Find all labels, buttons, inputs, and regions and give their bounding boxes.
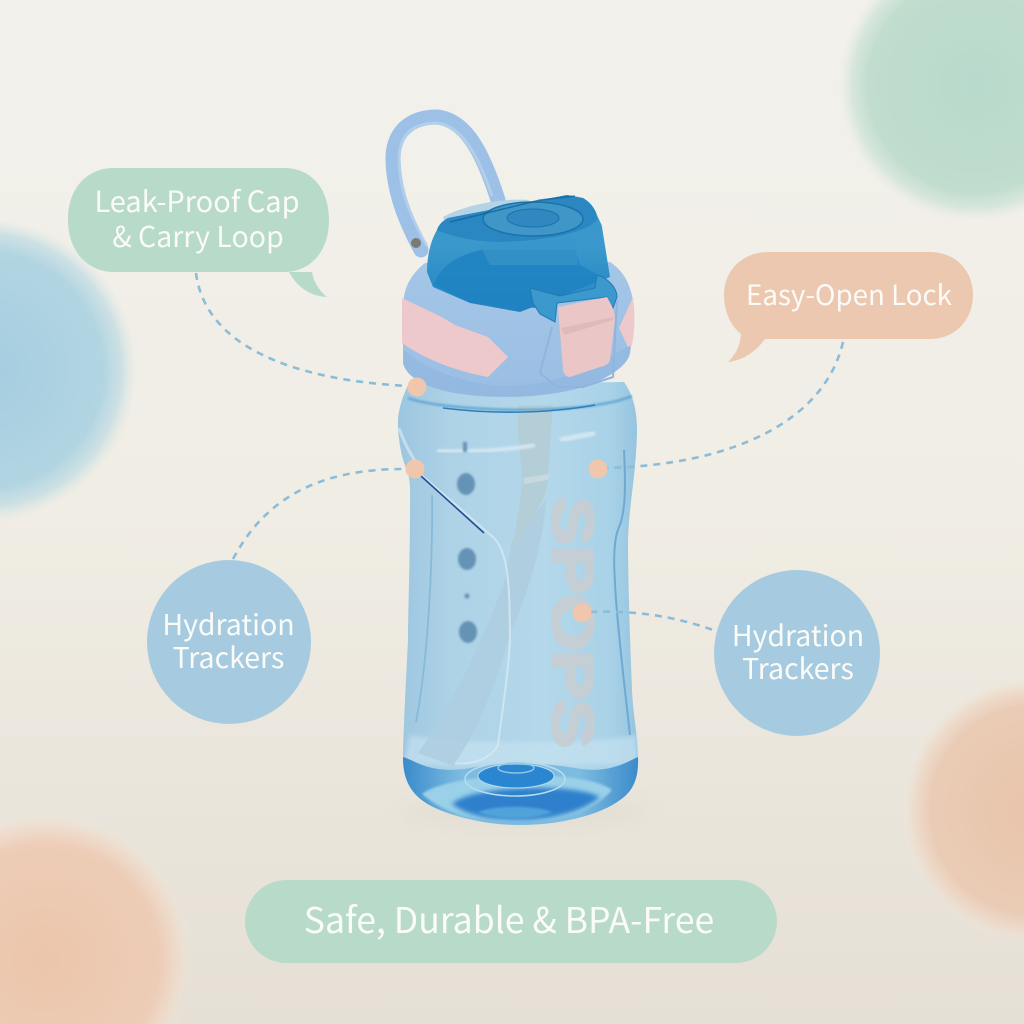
bottle lettering: SPOPS	[540, 497, 604, 748]
callout: leak-proof cap	[68, 168, 329, 297]
bottle	[398, 382, 650, 825]
decorative blob: blue left	[0, 215, 140, 525]
marker dots	[406, 378, 608, 622]
bottle base	[403, 757, 638, 825]
lid rear disc	[443, 200, 530, 232]
banner: safe, durable, BPA-free: Safe, Durable & BPA-Free	[304, 893, 714, 944]
lock housing	[540, 300, 617, 387]
callout: easy-open lock: Easy-Open Lock	[746, 273, 952, 313]
pale water band	[404, 735, 638, 765]
connector: leak-proof cap	[196, 273, 408, 386]
lid inner cylinder	[434, 250, 606, 308]
connector: easy-open lock	[605, 342, 843, 468]
blue flip lid	[427, 195, 617, 322]
badge: hydration trackers right	[714, 570, 880, 736]
callout: leak-proof cap: & Carry Loop	[112, 215, 284, 256]
measurement marks	[457, 442, 477, 643]
badge: hydration trackers left: Hydration	[162, 603, 295, 644]
bottle shadow	[400, 800, 650, 824]
badge: hydration trackers left: Trackers	[173, 636, 284, 677]
decorative blob: peach right	[900, 675, 1024, 945]
callout: easy-open lock	[724, 252, 973, 362]
pink grip band left	[402, 298, 508, 377]
neck ridges	[408, 396, 632, 410]
banner: safe, durable, BPA-free	[245, 880, 777, 963]
decorative blob: peach bottom left	[0, 812, 195, 1024]
lid hinge	[530, 275, 617, 322]
straw	[418, 405, 553, 766]
pink lock latch	[558, 297, 615, 377]
bottle body	[398, 382, 638, 825]
badge: hydration trackers right: Trackers	[742, 647, 854, 688]
badge: hydration trackers right: Hydration	[732, 614, 864, 655]
decorative blob: green top right	[835, 0, 1024, 225]
callout: leak-proof cap: Leak-Proof Cap	[94, 179, 300, 221]
cap ring	[403, 262, 634, 397]
lid top plate	[437, 195, 597, 242]
base inner disc	[422, 775, 612, 822]
connector: hydration trackers left	[233, 469, 408, 559]
pink grip band right	[619, 297, 634, 347]
diagonal ridge	[418, 472, 510, 763]
connector: hydration trackers right	[590, 612, 716, 631]
badge: hydration trackers left	[147, 560, 311, 724]
carry loop	[393, 117, 498, 250]
